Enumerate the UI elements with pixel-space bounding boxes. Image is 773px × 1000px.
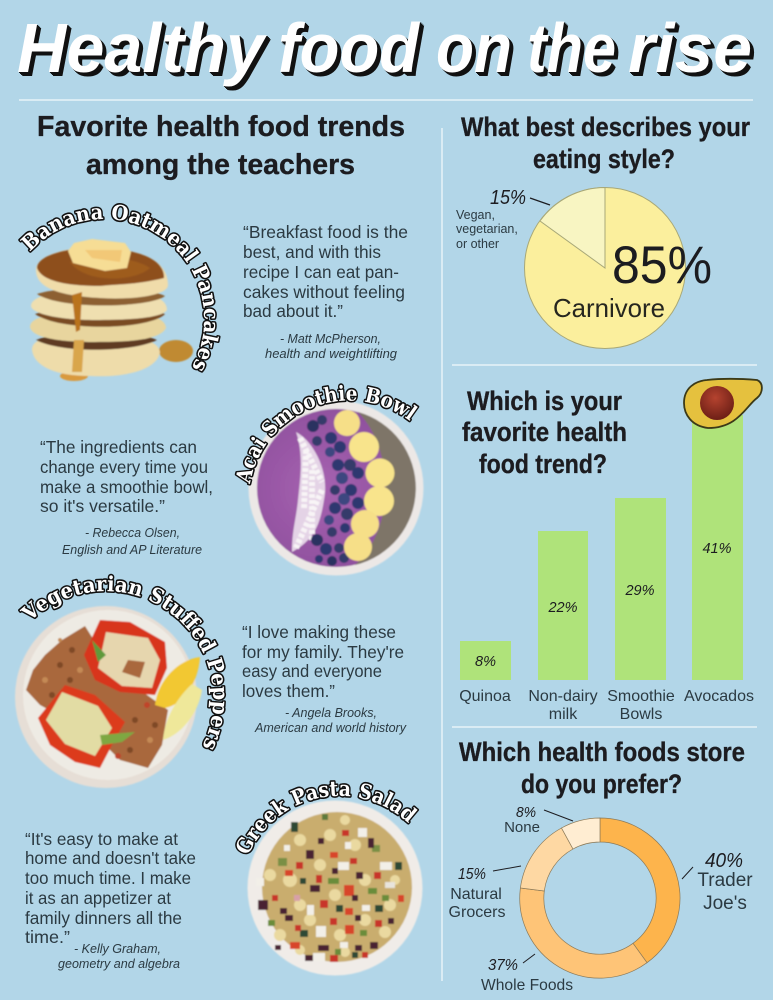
panel: acai smoothie bowl [40,383,424,576]
panel: health foods store [449,737,753,994]
heading: eating style [461,112,750,174]
callout: 15% natural grocers: 15% [458,866,486,883]
callout: 37% whole foods [481,954,573,994]
quote: matt mcpherson: best, and with this [243,242,381,262]
quote: kelly graham: time.” [25,927,70,947]
heading: eating style: eating style? [533,144,675,174]
quote: kelly graham: it as an appetizer at [25,888,171,908]
quote: kelly graham: home and doesn't take [25,848,196,868]
callout: 8% none: 8% [516,804,536,821]
title: Healthy [17,9,267,87]
callout: 15% vegan: Vegan, [456,208,495,222]
panel: eating style [456,112,750,348]
bar: avocados: Avocados [684,688,754,705]
callout: 15% vegan: vegetarian, [456,222,518,236]
icon: avocado [684,379,762,428]
image: pancake stack [30,239,193,381]
quote: kelly graham: too much time. I make [25,868,191,888]
panel: favorite trend [459,379,762,723]
bar: smoothie bowls: Bowls [620,706,662,723]
bar: smoothie bowls [607,498,675,723]
quote: rebecca olsen: so it's versatile.” [40,496,165,516]
quote: kelly graham: family dinners all the [25,908,182,928]
curved label: acai smoothie bowl: Acai Smoothie Bowl [234,383,420,486]
quote: angela brooks [242,622,407,735]
quote: angela brooks: “I love making these [242,622,396,642]
heading: favorite trend: Which is your [467,386,622,416]
quote: rebecca olsen: English and AP Literature [62,542,202,557]
quote: kelly graham: - Kelly Graham, [74,941,161,956]
bar: non-dairy milk [528,531,598,723]
bar: avocados [684,415,754,705]
bar: quinoa: Quinoa [459,688,511,705]
value: 85%: 85% [612,236,712,295]
callout: 15% natural grocers: Natural [450,886,502,903]
heading: health foods store: Which health foods store [459,737,745,767]
bar: non-dairy milk: milk [549,706,578,723]
quote: angela brooks: loves them.” [242,681,335,701]
quote: angela brooks: easy and everyone [242,661,382,681]
callout: 40% trader joe's: 40% [705,850,743,872]
image: smoothie bowl [248,400,424,576]
heading: health foods store: do you prefer? [521,769,682,799]
callout: 15% natural grocers: Grocers [449,904,505,921]
heading: favorite trend: favorite health [462,417,627,447]
pie chart: carnivore [524,188,686,348]
quote: rebecca olsen: “The ingredients can [40,437,197,457]
title: the [527,9,616,87]
image: pasta salad bowl [248,800,422,976]
quote: rebecca olsen: change every time you [40,457,208,477]
quote: matt mcpherson: cakes without feeling [243,282,405,302]
callout: 40% trader joe's: Trader [697,870,753,891]
heading: favorite trend: food trend? [479,449,607,479]
bar: quinoa: 8% [475,654,496,670]
curved label: vegetarian stuffed peppers: Vegetarian Stuffed Peppers [18,574,226,752]
callout: 15% natural grocers [449,866,521,921]
title: food [278,9,420,87]
quote: rebecca olsen: make a smoothie bowl, [40,477,213,497]
bar: smoothie bowls: Smoothie [607,688,675,705]
heading: favorite health food trends: Favorite health food trends [37,111,405,143]
callout: 15% vegan: 15% [490,187,526,209]
callout: 37% whole foods: 37% [488,957,518,974]
curved label: greek pasta salad: Greek Pasta Salad [235,780,420,854]
quote: angela brooks: - Angela Brooks, [285,705,377,720]
panel: banana oatmeal pancakes [18,203,408,382]
heading: health foods store [459,737,745,799]
donut chart [520,818,680,978]
bar chart [459,415,754,723]
callout: 15% vegan [456,187,550,251]
panel: vegetarian stuffed peppers [14,574,407,788]
quote: rebecca olsen [40,437,213,557]
bar: quinoa [459,641,511,705]
callout: 40% trader joe's [682,850,753,914]
heading: favorite trend [462,386,627,479]
bar: non-dairy milk: 22% [547,600,578,616]
quote: rebecca olsen: - Rebecca Olsen, [85,525,180,540]
heading: favorite health food trends: among the teachers [86,149,355,181]
callout: 15% vegan: or other [456,237,499,251]
quote: matt mcpherson: “Breakfast food is the [243,222,408,242]
quote: angela brooks: for my family. They're [242,642,404,662]
quote: matt mcpherson [243,222,408,361]
curved label: banana oatmeal pancakes: Banana Oatmeal Pancakes [18,203,221,373]
image: stuffed peppers plate [15,606,202,788]
title: on [436,9,512,87]
callout: 40% trader joe's: Joe's [703,893,747,914]
quote: matt mcpherson: recipe I can eat pan- [243,262,399,282]
quote: angela brooks: American and world history [254,720,407,735]
title: rise [628,9,752,87]
quote: matt mcpherson: - Matt McPherson, [280,331,381,346]
callout: 8% none [504,804,573,836]
bar: avocados: 41% [702,541,732,557]
quote: kelly graham: geometry and algebra [58,956,180,971]
bar: non-dairy milk: Non-dairy [528,688,598,705]
panel: greek pasta salad [25,780,424,976]
quote: matt mcpherson: health and weightlifting [265,346,398,361]
callout: 8% none: None [504,819,540,836]
callout: 37% whole foods: Whole Foods [481,977,573,994]
quote: kelly graham: “It's easy to make at [25,829,178,849]
quote: kelly graham [25,829,196,971]
label: carnivore: Carnivore [553,293,665,323]
heading: favorite health food trends [37,111,405,181]
bar: smoothie bowls: 29% [624,583,655,599]
quote: matt mcpherson: bad about it.” [243,301,343,321]
